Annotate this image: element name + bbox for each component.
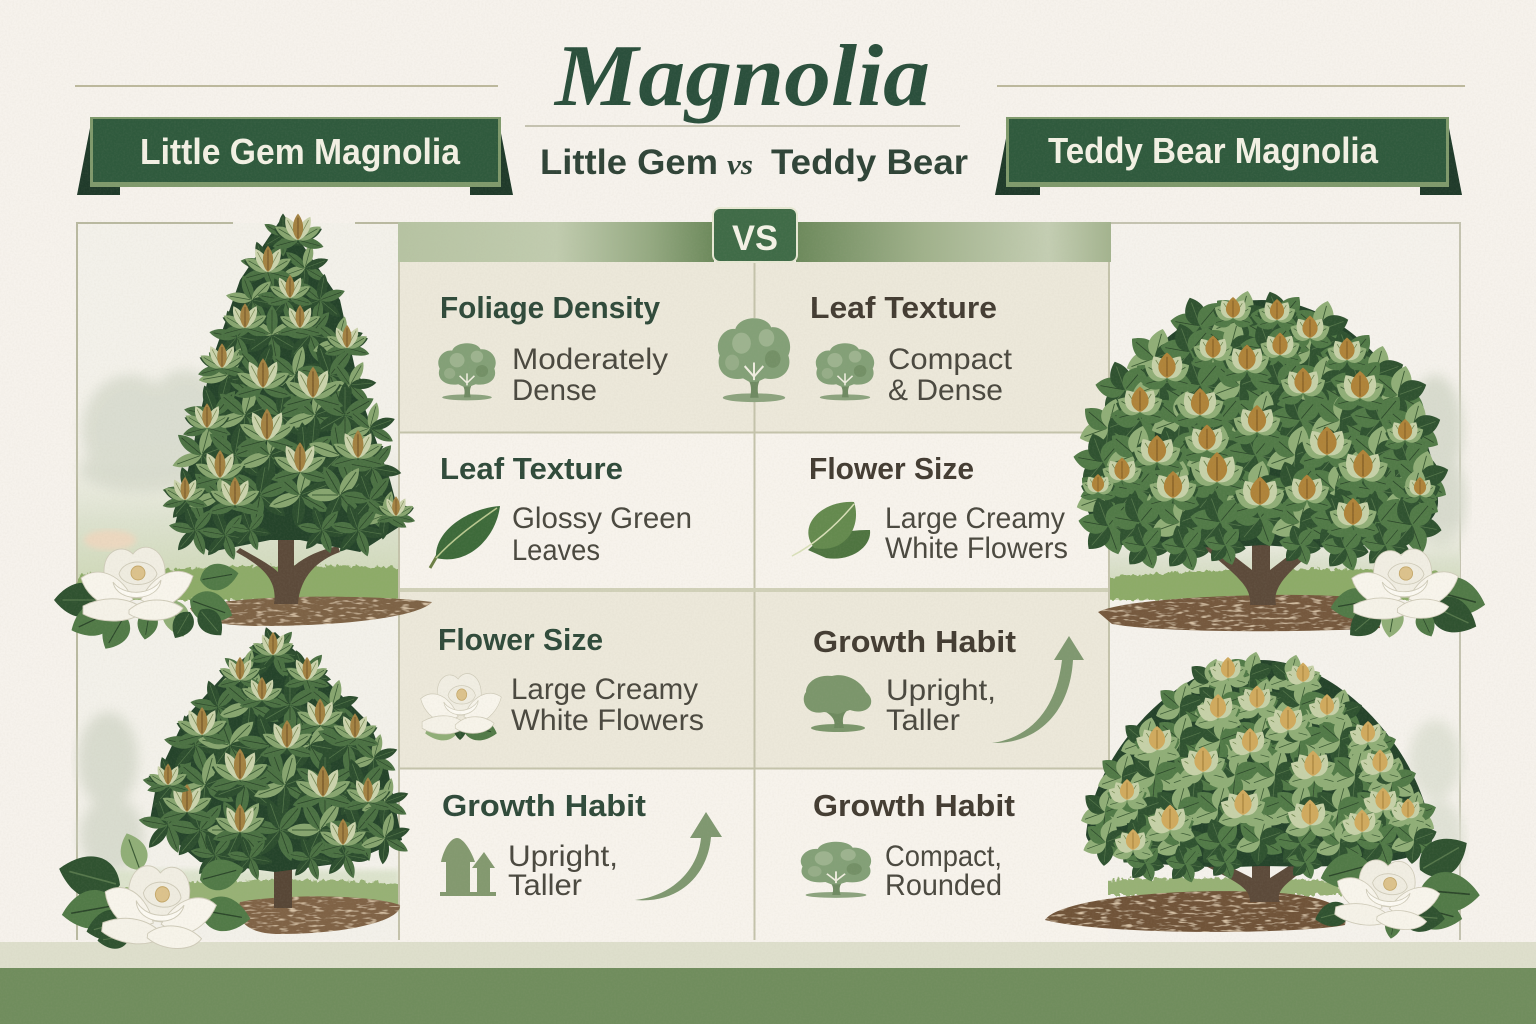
- value text: Glossy Green: [512, 502, 692, 535]
- value text: White Flowers: [885, 532, 1068, 565]
- row 2 cells: [400, 433, 1108, 589]
- value text: Leaves: [512, 534, 600, 567]
- VS badge: VS: [732, 219, 778, 258]
- value text: Large Creamy: [511, 673, 698, 706]
- header band left: [398, 222, 714, 262]
- value text: & Dense: [888, 374, 1003, 407]
- mulch: [190, 597, 432, 626]
- value text: Taller: [508, 869, 582, 902]
- illustration: Teddy Bear lower shrub: [1045, 650, 1482, 940]
- icon: up arrows: [440, 838, 496, 896]
- value text: Large Creamy: [885, 502, 1065, 535]
- heading: Flower Size: [809, 451, 974, 486]
- top rule left: [75, 85, 498, 87]
- heading: Growth Habit: [442, 788, 646, 823]
- cell: growth habit lower left: [440, 788, 722, 902]
- trunk: [236, 510, 340, 604]
- banner: Teddy Bear Magnolia: [995, 117, 1462, 195]
- banner: Little Gem Magnolia: [77, 117, 513, 195]
- value text: Dense: [512, 374, 597, 407]
- panel: left illustration background: [77, 223, 430, 940]
- icon: rounded tree: [801, 842, 871, 898]
- banner: Little Gem Magnolia: Little Gem Magnolia: [140, 131, 461, 172]
- cell: flower size right: [792, 451, 1068, 565]
- value text: Moderately: [512, 343, 668, 376]
- icon: tree: [438, 343, 496, 400]
- subtitle: Little Gem: [540, 143, 718, 182]
- value text: Compact,: [885, 840, 1002, 873]
- illustration: Little Gem lower tree: [54, 625, 412, 954]
- mulch: [239, 896, 400, 934]
- banner: Teddy Bear Magnolia: Teddy Bear Magnolia: [1048, 130, 1379, 171]
- title underline: [525, 125, 960, 127]
- value text: Upright,: [508, 840, 618, 873]
- value text: Rounded: [885, 869, 1002, 902]
- trunk: [1195, 525, 1330, 605]
- heading: Growth Habit: [813, 788, 1015, 823]
- cell: leaf texture left: [430, 451, 692, 568]
- trunk: [1195, 848, 1322, 902]
- foliage: [1072, 288, 1452, 573]
- comparison table: [398, 208, 1111, 941]
- flower with leaves: [54, 829, 253, 954]
- mulch: [1098, 595, 1380, 631]
- icon: two leaves: [792, 502, 870, 559]
- heading: Leaf Texture: [440, 451, 623, 486]
- flower with leaves: [1312, 827, 1482, 940]
- title block: [75, 28, 1465, 182]
- cell: flower size left: [421, 622, 704, 745]
- icon: magnolia flower: [421, 674, 501, 745]
- value text: Taller: [886, 704, 960, 737]
- subtitle: vs: [727, 149, 753, 181]
- arrow: curved up: [992, 636, 1084, 743]
- heading: Flower Size: [438, 622, 603, 657]
- value text: Upright,: [886, 674, 996, 707]
- table grid lines: [399, 262, 1109, 940]
- cell: leaf texture right: [810, 290, 1013, 407]
- bottom ledge: [0, 942, 1536, 968]
- top rule right: [997, 85, 1465, 87]
- mulch: [1045, 891, 1346, 932]
- icon: centre tree: [718, 318, 790, 402]
- heading: Leaf Texture: [810, 290, 997, 325]
- row 2 to 3 separator: [400, 588, 1108, 592]
- trunk: [250, 835, 320, 908]
- heading: Foliage Density: [440, 290, 661, 325]
- header band right: [796, 222, 1111, 262]
- cell: growth habit lower right: [801, 788, 1015, 902]
- flower with leaves: [1328, 549, 1490, 645]
- value text: Compact: [888, 343, 1013, 376]
- icon: tree: [816, 343, 874, 400]
- row 3 cells: [400, 591, 1108, 768]
- row 4 cells: [400, 769, 1108, 941]
- bottom green band: [0, 968, 1536, 1024]
- value text: White Flowers: [511, 704, 704, 737]
- subtitle: Teddy Bear: [771, 143, 968, 182]
- panel: right illustration background: [1050, 223, 1466, 940]
- flower with leaves: [54, 547, 241, 655]
- VS badge: [713, 208, 797, 262]
- arrow: curved up: [635, 812, 722, 900]
- title: Magnolia: [553, 28, 930, 125]
- cell: growth habit upper right: [804, 624, 1084, 743]
- icon: glossy leaf: [430, 506, 500, 568]
- illustration: Little Gem upper tree: [54, 207, 432, 655]
- row 1 cells: [400, 262, 1108, 432]
- illustration: Teddy Bear upper shrub: [1072, 288, 1490, 645]
- heading: Growth Habit: [813, 624, 1016, 659]
- icon: tree: [804, 675, 871, 732]
- cell: foliage density left: [438, 290, 668, 407]
- foliage: [138, 625, 412, 881]
- foliage: [162, 207, 416, 562]
- foliage: [1078, 650, 1439, 885]
